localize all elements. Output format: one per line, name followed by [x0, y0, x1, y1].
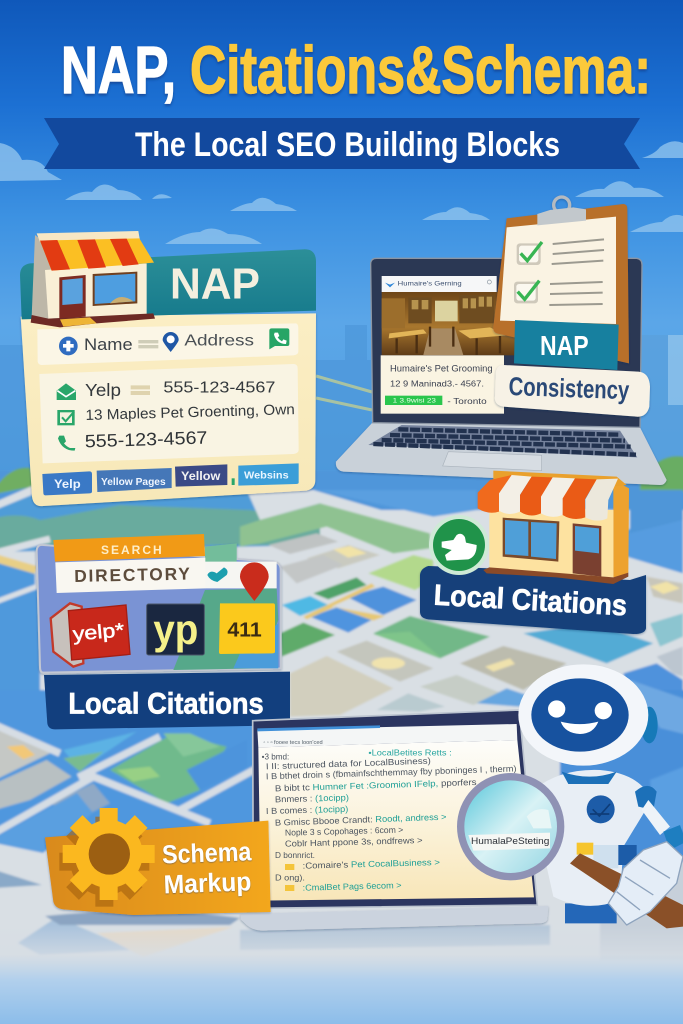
heading: NAP: NAP	[170, 259, 260, 308]
laptop: schema code	[241, 710, 548, 931]
icon: teal check	[207, 567, 228, 582]
code editor: I B bthet droin s (fbmainfschthemmay fby pboninges I , therm)	[266, 763, 517, 781]
icon: name badge	[59, 337, 78, 355]
code editor: D ong).	[275, 873, 305, 883]
label: Local Citations: Local Citations	[68, 687, 264, 720]
laptop base	[241, 906, 548, 931]
icon: 411 tile	[219, 603, 275, 654]
directory frame	[37, 543, 281, 673]
code editor: Nople 3 s Copohages : 6com >	[285, 825, 403, 838]
button: Yellow Pages	[97, 468, 172, 492]
city skyline left	[0, 325, 371, 470]
directory bar	[55, 558, 277, 593]
label: Schema Markup	[45, 808, 271, 915]
laptop screen	[371, 258, 642, 427]
text: address: Address	[184, 332, 254, 349]
magnifying glass: HumalaPeSteting	[471, 836, 549, 846]
code editor: I B comes : (1ocipp)	[266, 804, 348, 816]
code editor: B bibt tc Humner Fet :Groomion IFelp, pporfers	[275, 777, 477, 793]
code editor: B Gmisc Bbooe Crandt: Roodt, andress >	[275, 812, 447, 828]
badge: NAP: NAP	[540, 330, 589, 361]
robot hand	[608, 842, 683, 925]
magnifying glass	[461, 777, 561, 877]
left strip blocks	[0, 492, 320, 740]
panel header	[20, 249, 316, 319]
subtitle ribbon	[44, 118, 640, 169]
browser bar	[257, 724, 517, 747]
text: Schema Markup: Markup	[163, 866, 252, 899]
text: name: Name	[84, 335, 133, 354]
title: NAP,	[61, 33, 176, 108]
text: address line: 13 Maples Pet Groenting, Own	[85, 402, 295, 424]
icon: yp tile: yp	[153, 607, 198, 653]
bridge	[316, 376, 372, 410]
right side blocks behind robot	[560, 680, 683, 960]
panel: directory	[37, 534, 290, 729]
icon: gear	[59, 808, 155, 907]
code editor: I II: structured data for LocalBusiness)	[266, 756, 431, 771]
details box: 555-123-4567	[163, 380, 275, 397]
button: Yellow Pages: Yellow Pages	[101, 477, 166, 488]
clipboard	[493, 197, 629, 363]
clipboard clip	[537, 197, 586, 225]
robot head	[518, 664, 658, 766]
navy banner	[420, 566, 646, 634]
button: Yellow: Yellow	[181, 469, 221, 483]
robot arm	[635, 786, 683, 850]
banner text: Local Citations	[433, 579, 628, 622]
button: Yelp	[42, 471, 92, 495]
icon: 411 tile: 411	[227, 619, 262, 642]
checklist item two	[514, 281, 603, 305]
browser bar: Humaire's Gerning	[398, 280, 462, 287]
row: name and address	[37, 323, 298, 365]
label: Consistency	[495, 365, 650, 417]
robot body	[533, 770, 652, 923]
laptop screen frame	[253, 710, 537, 908]
code editor: :CmalBet Pags 6ecom >	[302, 880, 402, 893]
code editor: D bonnrict.	[275, 850, 315, 860]
icon: address pin	[163, 332, 179, 352]
icon: green hand badge	[429, 515, 489, 575]
text: phone: 555-123-4567	[84, 427, 208, 451]
code editor	[258, 740, 534, 901]
button: Yelp: Yelp	[54, 477, 81, 491]
code editor: •LocalBetites Retts :	[368, 747, 452, 757]
awning	[478, 475, 618, 521]
button: Yellow	[175, 464, 227, 487]
browser bar: ◦ ◦ ▫ fooee tecs loon'ced	[263, 740, 323, 746]
storefront	[478, 471, 629, 584]
panel: NAP	[20, 231, 316, 506]
panel: local citations store	[420, 471, 646, 634]
listing text: Humaire's Pet Grooming	[390, 364, 493, 374]
code editor: •3 bmd:	[262, 751, 289, 761]
browser bar	[382, 276, 497, 292]
listing text: - Toronto	[447, 397, 487, 406]
panel body	[21, 313, 316, 506]
text: Schema Markup: Schema	[161, 836, 252, 869]
directory bar: DIRECTORY	[74, 564, 190, 586]
icon: yelp tile	[51, 603, 130, 667]
code editor: Coblr Hant ppone 3s, ondfrews >	[285, 835, 423, 849]
laptop: NAP consistency	[336, 197, 667, 485]
bottom fade	[0, 925, 683, 1024]
listing text	[381, 355, 504, 414]
sky background	[0, 0, 683, 520]
checklist item one	[517, 239, 604, 265]
listing text: 12 9 Maninad3.- 4567.	[390, 380, 484, 389]
search tab: SEARCH	[101, 543, 162, 557]
clouds	[0, 141, 683, 244]
text: yelp phone: Yelp	[85, 380, 121, 400]
icon: phone bubble	[269, 328, 289, 349]
listing text: 1 3.9wisi 23	[393, 398, 437, 404]
icon: check	[57, 410, 75, 425]
icon: yelp tile: yelp*	[72, 620, 126, 646]
map blocks upper	[240, 490, 683, 720]
icon: red map pin	[240, 562, 269, 601]
robot	[461, 664, 683, 928]
city skyline right	[640, 335, 683, 470]
code editor: :Comaire's Pet CocalBusiness >	[302, 857, 440, 871]
icon: storefront	[31, 231, 155, 327]
search tab	[53, 534, 205, 562]
details box	[39, 364, 299, 463]
code editor: Bnmers : (1ocipp)	[275, 792, 349, 804]
icon: mail	[57, 383, 76, 400]
storefront interior photo	[382, 292, 515, 355]
street map	[0, 456, 683, 996]
laptop base	[336, 422, 667, 485]
magnifier handle	[570, 853, 683, 928]
label: Local Citations	[44, 672, 290, 729]
subtitle ribbon: The Local SEO Building Blocks	[135, 126, 560, 164]
button: Websins	[238, 463, 299, 486]
text: Schema Markup	[161, 836, 252, 899]
label: Consistency: Consistency	[508, 371, 630, 405]
icon: phone	[58, 436, 75, 451]
button: Websins: Websins	[244, 471, 289, 482]
map blocks foreground	[0, 793, 550, 957]
map blocks lower	[0, 690, 260, 843]
badge: NAP	[514, 320, 619, 370]
